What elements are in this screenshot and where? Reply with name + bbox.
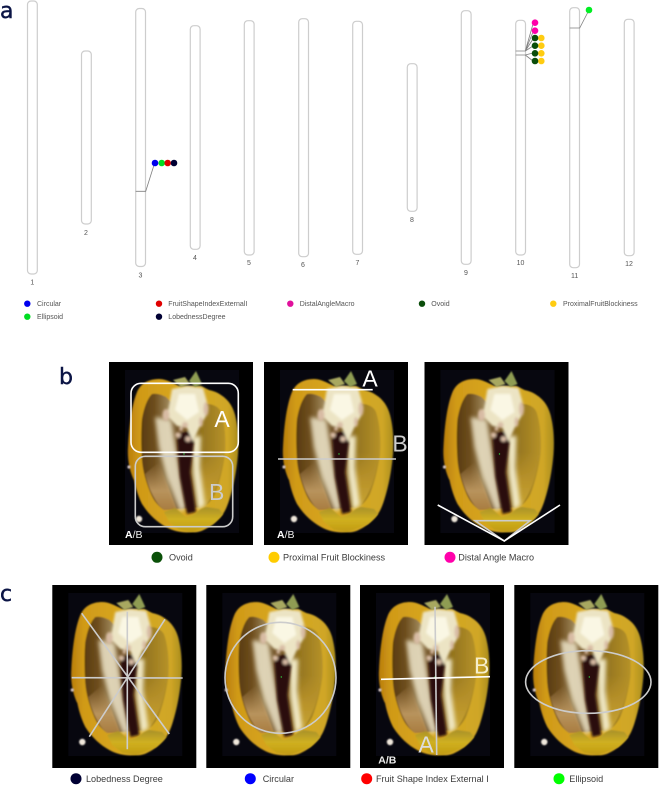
legend row c xyxy=(70,773,603,784)
heading b: b xyxy=(59,365,73,390)
panel b2: proximal fruit blockiness: A xyxy=(362,366,378,392)
legend: chromosome map traits xyxy=(24,300,638,321)
chromosome 12 xyxy=(624,19,634,268)
legend row b xyxy=(152,552,534,563)
chromosome 1 xyxy=(28,1,37,286)
legend row c: Fruit Shape Index External I xyxy=(376,774,489,784)
legend row b: Proximal Fruit Blockiness xyxy=(283,553,386,563)
chromosome 7: 7 xyxy=(356,260,360,267)
panel c2: circular xyxy=(206,585,350,768)
legend row c: Lobedness Degree xyxy=(86,774,163,784)
QTL markers on chromosome 3 xyxy=(136,160,177,191)
panel c1: lobedness degree xyxy=(52,585,196,768)
chromosome 9: 9 xyxy=(464,270,468,277)
chromosome 11 xyxy=(570,8,580,280)
legend: chromosome map traits: Ovoid xyxy=(431,301,450,308)
legend: chromosome map traits: LobednessDegree xyxy=(168,314,226,321)
chromosome 6 xyxy=(299,19,308,269)
panel b1: ovoid: A/B xyxy=(125,529,143,541)
panel b1: ovoid xyxy=(109,362,253,545)
chromosome 8 xyxy=(407,64,417,224)
panel b2: proximal fruit blockiness xyxy=(264,362,408,545)
chromosome 5 xyxy=(244,21,254,267)
legend: chromosome map traits: ProximalFruitBlockiness xyxy=(563,301,638,308)
QTL marker on chromosome 11 xyxy=(570,7,592,28)
panel b2: proximal fruit blockiness: A/B xyxy=(277,529,295,541)
chromosome 11: 11 xyxy=(571,273,578,280)
legend: chromosome map traits: Circular xyxy=(37,301,62,308)
panel c3: fruit shape index external I: B xyxy=(474,652,489,678)
panel b3: distal angle macro xyxy=(424,362,568,545)
panel b2: proximal fruit blockiness: B xyxy=(392,431,408,457)
panel b1: ovoid: A xyxy=(214,406,230,432)
panel c3: fruit shape index external I xyxy=(360,585,504,768)
panel b1: ovoid: B xyxy=(209,479,224,505)
legend: chromosome map traits: FruitShapeIndexExternalI xyxy=(168,301,247,308)
QTL markers on chromosome 10 xyxy=(516,19,545,64)
chromosome 1: 1 xyxy=(30,279,34,286)
legend: chromosome map traits: DistalAngleMacro xyxy=(300,301,355,308)
panel a: chromosome map xyxy=(0,0,638,321)
legend row c: Circular xyxy=(263,774,294,784)
legend row b: Distal Angle Macro xyxy=(458,553,534,563)
legend row b: Ovoid xyxy=(169,553,193,563)
chromosome 3 xyxy=(136,8,146,279)
panel c3: fruit shape index external I: A/B xyxy=(378,754,397,766)
chromosome 10: 10 xyxy=(517,260,524,267)
chromosome 5: 5 xyxy=(247,260,251,267)
chromosome 4: 4 xyxy=(193,255,197,262)
chromosome 9 xyxy=(461,11,471,277)
chromosome 12: 12 xyxy=(625,261,633,268)
chromosome 3: 3 xyxy=(139,272,143,279)
panel c4: ellipsoid xyxy=(514,585,658,768)
chromosome 2: 2 xyxy=(84,230,88,237)
panel c3: fruit shape index external I: A xyxy=(418,732,434,758)
legend row c: Ellipsoid xyxy=(569,774,603,784)
legend: chromosome map traits: Ellipsoid xyxy=(37,314,63,321)
chromosome 2 xyxy=(82,51,91,237)
chromosome 10 xyxy=(516,20,526,267)
chromosome 4 xyxy=(190,26,200,262)
chromosome 7 xyxy=(353,21,362,267)
heading c: c xyxy=(0,582,12,607)
chromosome 6: 6 xyxy=(301,262,305,269)
chromosome 8: 8 xyxy=(410,217,414,224)
